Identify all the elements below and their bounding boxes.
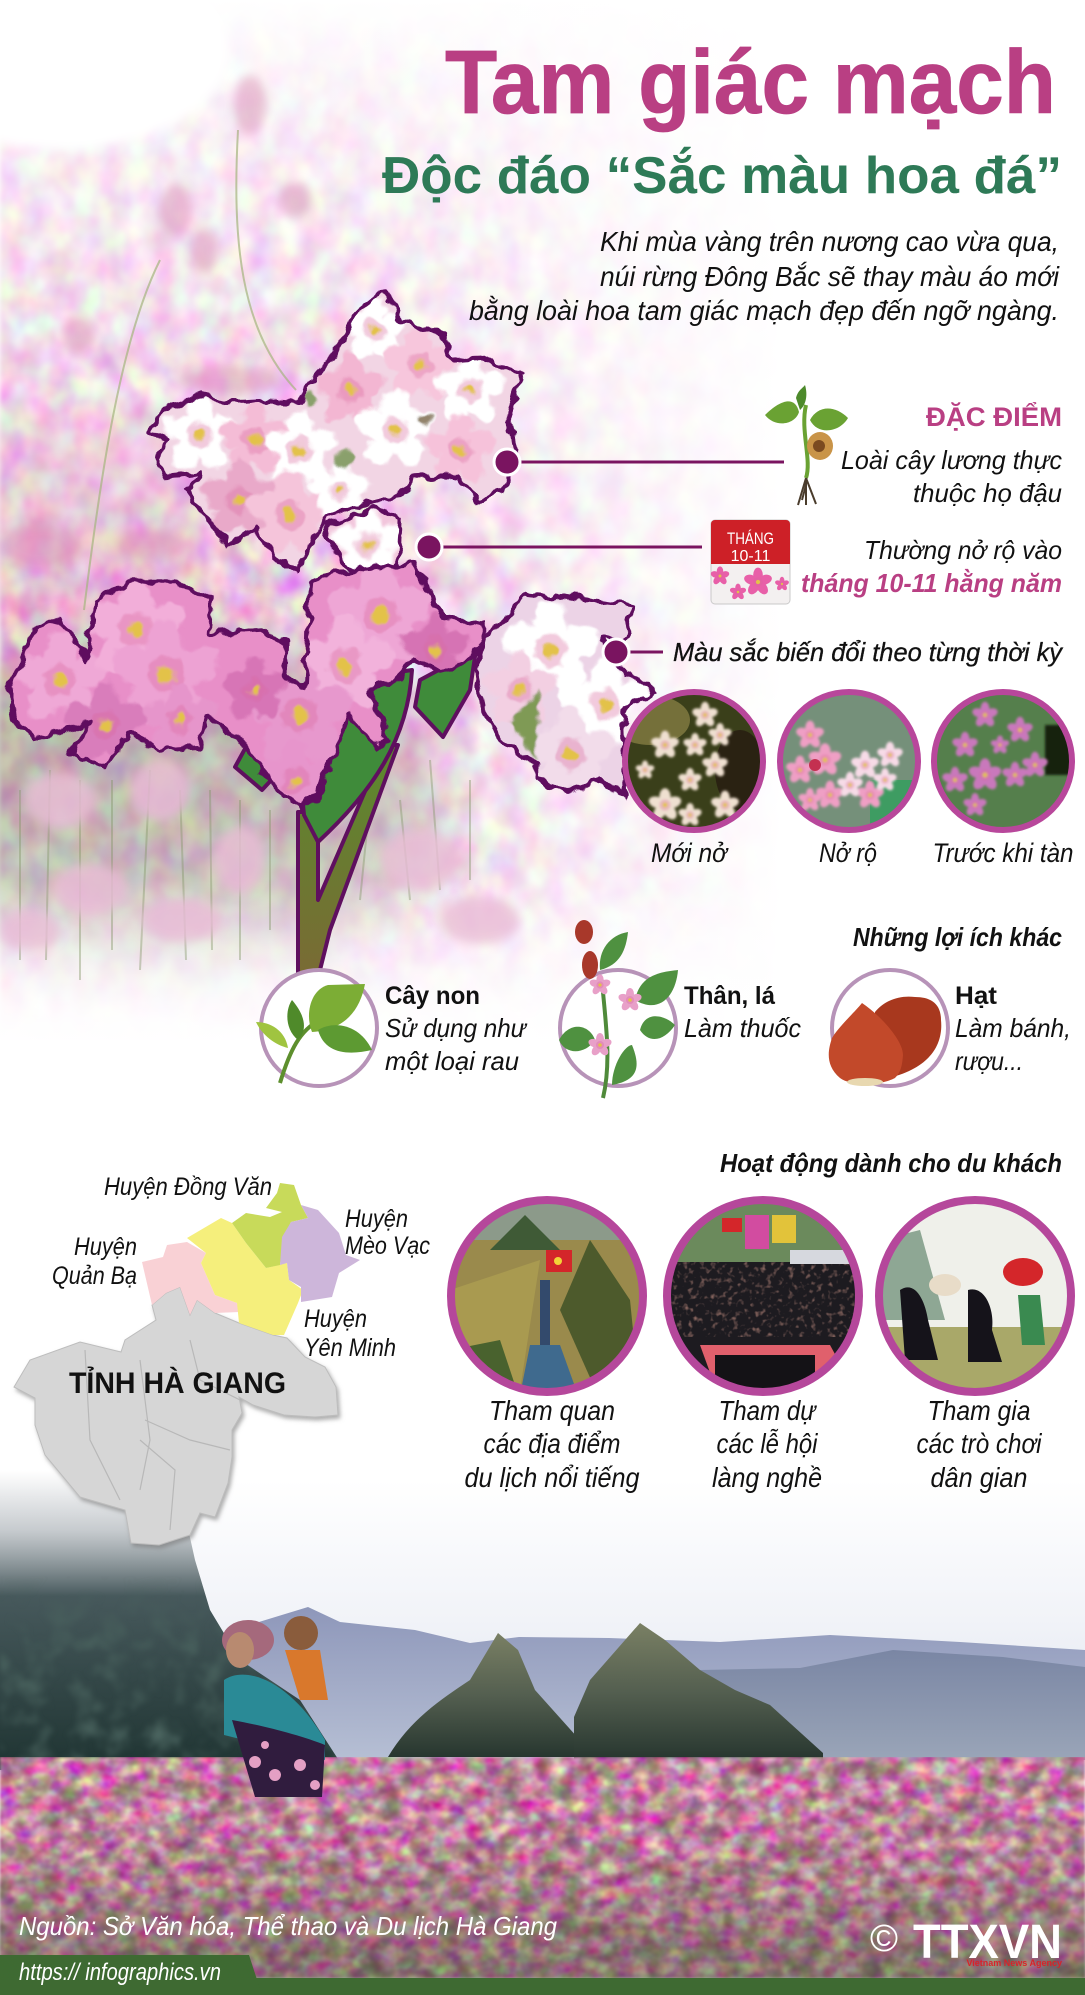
logo: TTXVN: TTXVN <box>913 1916 1062 1969</box>
flower cluster: bright pink <box>9 560 484 821</box>
callout line 1 <box>494 449 784 475</box>
photo: folk games <box>879 1200 1075 1397</box>
flower cluster: white right <box>477 594 657 803</box>
activity captions: các lễ hội <box>716 1428 818 1459</box>
forest left <box>0 1470 345 1770</box>
text: colour changes: Màu sắc biến đổi theo từng thời kỳ <box>673 637 1064 667</box>
map labels: Quản Bạ <box>52 1262 137 1290</box>
text: plant family <box>841 445 1062 508</box>
logo: TTXVN: © <box>870 1918 898 1960</box>
district borders <box>85 1340 240 1530</box>
flower stems <box>298 745 398 978</box>
icon: calendar: THÁNG <box>727 529 774 548</box>
text: young plant <box>385 982 527 1076</box>
text: young plant: Cây non <box>385 982 480 1010</box>
activity captions: Tham gia <box>928 1395 1030 1426</box>
icon: young plant <box>256 970 377 1086</box>
photo: newly bloomed <box>622 689 766 833</box>
map labels: Mèo Vạc <box>345 1232 430 1260</box>
map labels: Yên Minh <box>304 1334 396 1362</box>
karst peak right <box>574 1623 823 1760</box>
text: seeds <box>955 982 1071 1076</box>
map labels: Huyện Đồng Văn <box>104 1173 272 1201</box>
photo: flag tower <box>450 1200 645 1400</box>
text: stem and leaves: Thân, lá <box>684 982 775 1010</box>
map labels <box>52 1173 430 1362</box>
footer tab <box>0 1955 262 1995</box>
text: bloom time <box>801 535 1062 598</box>
footer bar <box>0 1978 1085 1995</box>
subtitle: Độc đáo “Sắc màu hoa đá” <box>382 146 1062 205</box>
text: stem and leaves: Làm thuốc <box>684 1013 801 1043</box>
flower field <box>0 1757 1085 1978</box>
text: bloom time: tháng 10-11 hằng năm <box>801 568 1062 598</box>
intro text: núi rừng Đông Bắc sẽ thay màu áo mới <box>600 261 1060 292</box>
activity captions: Tham quan <box>489 1395 615 1426</box>
text: seeds: Hạt <box>955 982 998 1010</box>
stage labels: Mới nở <box>651 838 729 868</box>
text: plant family: thuộc họ đậu <box>913 478 1062 508</box>
text: young plant: Sử dụng như <box>385 1013 527 1043</box>
map labels: Huyện <box>345 1205 408 1233</box>
region: Quản Bạ <box>142 1242 239 1315</box>
panel: bloom stages <box>610 690 1080 868</box>
main illustration: buckwheat flower <box>9 291 657 978</box>
icon: seeds <box>829 970 948 1086</box>
activity captions: các địa điểm <box>484 1428 620 1459</box>
icon: stem and leaves <box>559 920 678 1098</box>
icon: calendar <box>710 520 790 604</box>
intro text: bằng loài hoa tam giác mạch đẹp đến ngỡ ngàng. <box>469 295 1059 326</box>
panel: tourist activities <box>450 1148 1075 1493</box>
flower leaves <box>235 650 476 842</box>
activity captions <box>464 1395 1042 1493</box>
sky <box>0 1480 1085 1760</box>
title: Tam giác mạch <box>445 33 1056 133</box>
map: Hà Giang province <box>14 1173 430 1545</box>
url: https:// infographics.vn <box>19 1959 221 1986</box>
region: Đồng Văn <box>232 1183 308 1268</box>
activity captions: các trò chơi <box>916 1428 1042 1459</box>
landscape photo <box>0 1470 1085 1770</box>
region: Yên Minh <box>187 1218 303 1335</box>
activity captions: du lịch nổi tiếng <box>464 1462 640 1493</box>
map labels: Huyện <box>74 1233 137 1261</box>
photo: festival crowd <box>665 1200 860 1400</box>
intro text: Khi mùa vàng trên nương cao vừa qua, <box>600 226 1059 257</box>
text: plant family: Loài cây lương thực <box>841 445 1062 475</box>
logo: TTXVN: Vietnam News Agency <box>966 1958 1062 1968</box>
intro text <box>469 226 1060 326</box>
activity captions: làng nghề <box>712 1462 822 1493</box>
stage labels: Nở rộ <box>819 838 877 868</box>
woman carrying child <box>222 1616 328 1797</box>
stage labels <box>651 838 1074 868</box>
heading: đặc điểm: ĐẶC ĐIỂM <box>926 401 1062 432</box>
heading: other benefits: Những lợi ích khác <box>853 922 1062 952</box>
callout line 3 <box>603 639 663 665</box>
map labels: Huyện <box>304 1305 367 1333</box>
province label: TỈNH HÀ GIANG <box>69 1366 286 1400</box>
karst peak left <box>388 1633 595 1757</box>
activity captions: dân gian <box>930 1462 1028 1493</box>
text: stem and leaves <box>684 982 801 1043</box>
middle mountains <box>700 1650 1085 1760</box>
callout line 2 <box>416 534 702 560</box>
distant mountains <box>200 1607 1085 1760</box>
panel: other benefits <box>256 920 1071 1098</box>
region: Hà Giang gray <box>14 1287 338 1545</box>
photo: before withering <box>930 690 1080 835</box>
photo: full bloom <box>777 689 921 833</box>
activity captions: Tham dự <box>718 1395 817 1426</box>
text: seeds: rượu... <box>955 1046 1023 1076</box>
flower cluster: small white bud <box>325 507 408 584</box>
text: seeds: Làm bánh, <box>955 1013 1071 1043</box>
flower cluster: pale upper <box>149 291 522 570</box>
heading: activities: Hoạt động dành cho du khách <box>720 1148 1062 1178</box>
source: Nguồn: Sở Văn hóa, Thể thao và Du lịch Hà Giang <box>19 1911 557 1941</box>
text: young plant: một loại rau <box>385 1046 519 1076</box>
icon: calendar: 10-11 <box>731 548 770 565</box>
icon: seedling <box>765 385 848 505</box>
text: bloom time: Thường nở rộ vào <box>864 535 1062 565</box>
region: Mèo Vạc <box>280 1205 360 1302</box>
